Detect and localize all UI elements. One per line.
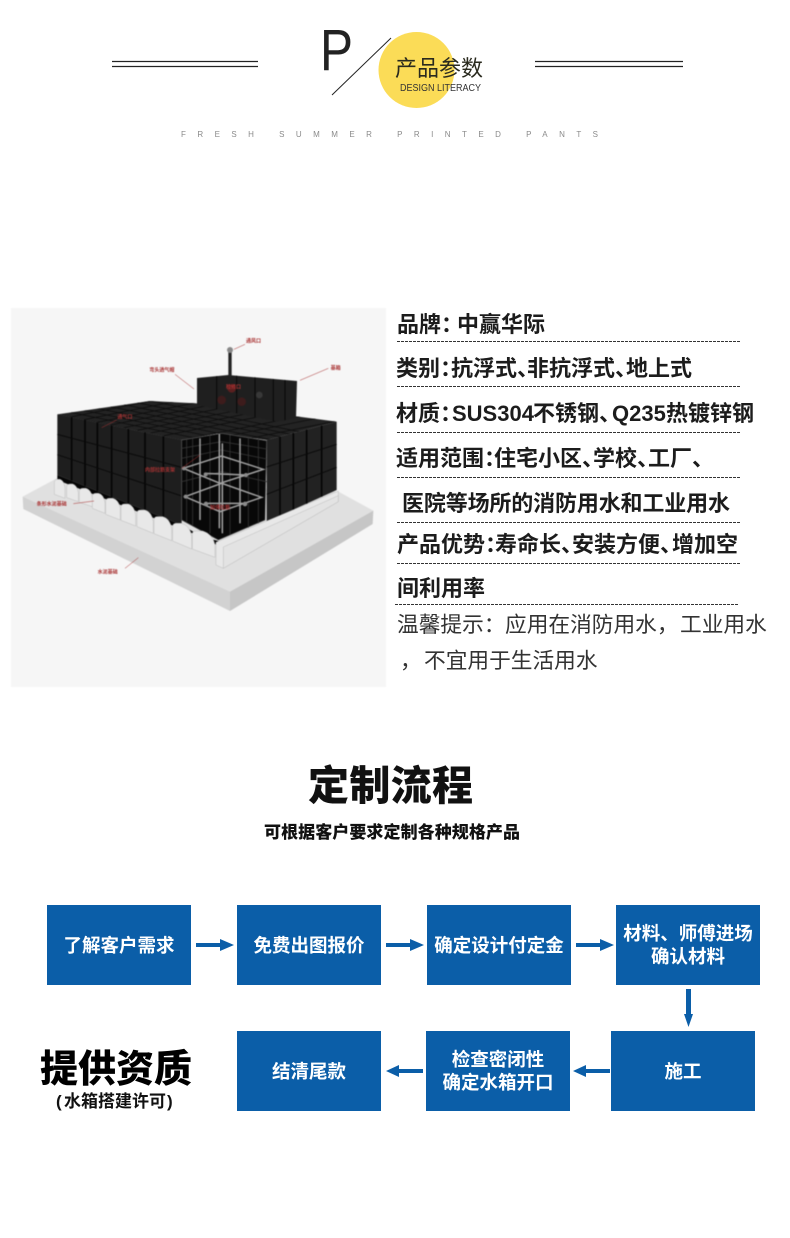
material line: 材质：	[396, 401, 462, 426]
panel: water tank illustration	[12, 308, 386, 686]
category line: 非抗浮式、	[527, 356, 637, 381]
arrow: step 2 to 3	[386, 939, 424, 951]
brand line: 中赢华际	[457, 312, 545, 337]
qualification note	[40, 1048, 192, 1111]
red callouts: 通气口	[117, 413, 132, 420]
right double rule	[535, 62, 683, 66]
flow step 5	[611, 1031, 755, 1111]
advantages line two: 间利用率	[397, 576, 485, 601]
notice line one: 应用在消防用水，	[505, 612, 679, 637]
tank interior with pipe frame	[182, 433, 267, 540]
arrow: step 5 to 6	[573, 1065, 610, 1077]
tagline: FRESH SUMMER PRINTED PANTS	[181, 130, 598, 139]
panel: specifications text	[395, 312, 767, 673]
material line: 不锈钢、	[533, 401, 621, 426]
flow arrows	[196, 939, 693, 1077]
section heading	[264, 763, 520, 842]
header	[112, 18, 683, 139]
notice line two: ，	[400, 648, 422, 673]
scope line one: 学校、	[593, 446, 659, 471]
advantages line one: 增加空	[672, 532, 738, 557]
material line: SUS304	[452, 401, 535, 426]
red callouts: 检修口	[226, 383, 241, 390]
material line: Q235	[612, 401, 666, 426]
subheading: design literacy: DESIGN LITERACY	[400, 82, 481, 94]
arrow: step 3 to 4	[576, 939, 614, 951]
note: tank construction permit: )	[167, 1092, 173, 1111]
flow step 3	[427, 905, 571, 985]
small upper tank with vent	[197, 347, 297, 422]
red callouts	[37, 338, 341, 575]
subtitle: 可根据客户要求定制各种规格产品	[264, 822, 520, 842]
flow step 4: 确认材料	[651, 946, 725, 967]
notice line one: 工业用水	[680, 612, 767, 637]
red callouts: 条形水泥基础	[37, 501, 67, 508]
heading: provide qualifications: 提供资质	[40, 1049, 192, 1091]
scope line one: 住宅小区、	[494, 446, 604, 471]
material line: 热镀锌钢	[666, 401, 754, 426]
flow step 3: 确定设计付定金	[434, 934, 564, 956]
flow step 7	[237, 1031, 381, 1111]
flow step 2: 免费出图报价	[253, 934, 364, 956]
image background	[11, 308, 386, 687]
advantages line one: 产品优势：	[397, 532, 507, 557]
flow step 7: 结清尾款	[272, 1060, 346, 1082]
scope line one: 适用范围：	[396, 446, 506, 471]
brand line: 品牌：	[397, 312, 463, 337]
left double rule	[112, 62, 258, 66]
flow step 4	[616, 905, 760, 985]
red callouts: 加强拉筋	[210, 504, 230, 511]
flow step 1	[47, 905, 191, 985]
flow step 4: 材料、师傅进场	[623, 923, 753, 944]
category line: 抗浮式、	[451, 356, 539, 381]
note: tank construction permit: 水箱搭建许可	[64, 1092, 166, 1111]
notice line two: 不宜用于生活用水	[424, 648, 598, 673]
scope line one: 工厂、	[648, 446, 714, 471]
arrow: step 1 to 2	[196, 939, 234, 951]
concrete slab	[23, 478, 373, 611]
notice line one: 温馨提示：	[397, 612, 505, 637]
flow step 2	[237, 905, 381, 985]
arrow: step 4 to 5	[684, 989, 693, 1027]
arrow: step 6 to 7	[386, 1065, 423, 1077]
yellow circle	[378, 32, 454, 108]
red callouts: 水泥基础	[98, 568, 118, 575]
advantages line one: 寿命长、	[495, 532, 583, 557]
flow step 6: 确定水箱开口	[442, 1072, 554, 1093]
category line: 类别：	[396, 356, 462, 381]
flow step 6: 检查密闭性	[452, 1049, 544, 1070]
letter P: P	[320, 18, 353, 83]
red callouts: 通风口	[246, 338, 261, 345]
category line: 地上式	[626, 356, 692, 381]
heading: product parameters: 产品参数	[395, 56, 483, 81]
scope line two: 医院等场所的消防用水和工业用水	[402, 491, 730, 516]
flow step 5: 施工	[664, 1060, 702, 1082]
advantages line one: 安装方便、	[572, 532, 682, 557]
flow step 6	[426, 1031, 570, 1111]
red callouts: 内部拉筋支架	[145, 466, 175, 473]
red callouts: 弯头透气帽	[149, 366, 174, 373]
diagonal line	[332, 38, 391, 95]
note: tank construction permit: (	[56, 1092, 62, 1111]
main tank	[56, 400, 338, 545]
red callouts: 基箱	[331, 365, 341, 372]
flow step 1: 了解客户需求	[63, 934, 174, 956]
concrete piers and curb	[54, 479, 338, 568]
title: customization process: 定制流程	[308, 763, 473, 809]
